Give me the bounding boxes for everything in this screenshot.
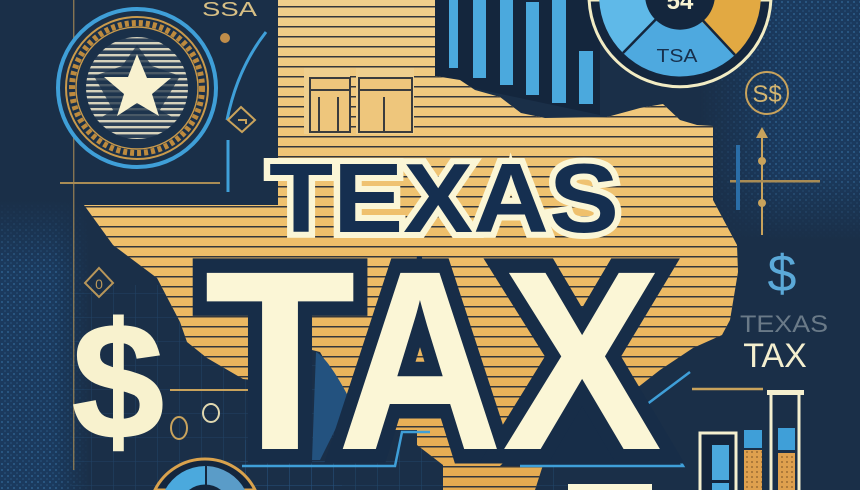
- headline: TEXAS: TEXAS: [269, 143, 619, 253]
- caption: TAX: TAX: [743, 337, 807, 375]
- caption: TEXAS: TEXAS: [740, 311, 828, 338]
- gold arrows ornament: [692, 388, 763, 390]
- vertical axis ornament: right: [730, 127, 820, 235]
- dollar coin icon: [746, 72, 788, 114]
- blueprint grid: lower centre: [240, 440, 570, 490]
- soft fade below right texture: [700, 170, 860, 240]
- grey-blue shape between T and A: [312, 352, 350, 460]
- small symbols: [171, 404, 219, 439]
- bar chart: top: [449, 0, 593, 104]
- bottom cream block: [568, 484, 652, 490]
- soft fade above left texture: [0, 200, 90, 270]
- map of Texas: [84, 0, 738, 490]
- pie chart: top right: [589, 0, 771, 87]
- small diamond icon: left: [85, 268, 113, 297]
- horizontal guide line: top left: [60, 182, 220, 184]
- pie chart: top right: TSA: [656, 46, 698, 66]
- small diamond icon: left: 0: [95, 276, 103, 292]
- bottom ring chart: [155, 459, 255, 490]
- vertical guide line: left: [73, 0, 74, 470]
- dollar sign: right: $: [768, 245, 797, 303]
- dark notch behind bar chart: [435, 0, 600, 115]
- small diamond icon: [228, 107, 255, 132]
- vertical blue tick: [226, 140, 230, 192]
- dollar coin icon: S$: [752, 81, 782, 108]
- headline TAX outline: [192, 256, 683, 464]
- large dollar sign: $: [72, 289, 164, 473]
- small gold dot: [220, 33, 230, 43]
- seal with star: [58, 9, 216, 167]
- horizontal accent line: [170, 389, 250, 391]
- blueprint grid: lower left: [72, 285, 342, 490]
- headline: TAX: [204, 218, 662, 490]
- dotted texture: left: [0, 211, 84, 490]
- dotted texture: right: [700, 0, 860, 240]
- building icon on map: [304, 68, 414, 134]
- dark backing under X: [500, 385, 683, 466]
- blue outline of headline base: [242, 372, 690, 466]
- bar chart: bottom right: [700, 390, 804, 490]
- blue swoosh: [227, 32, 266, 120]
